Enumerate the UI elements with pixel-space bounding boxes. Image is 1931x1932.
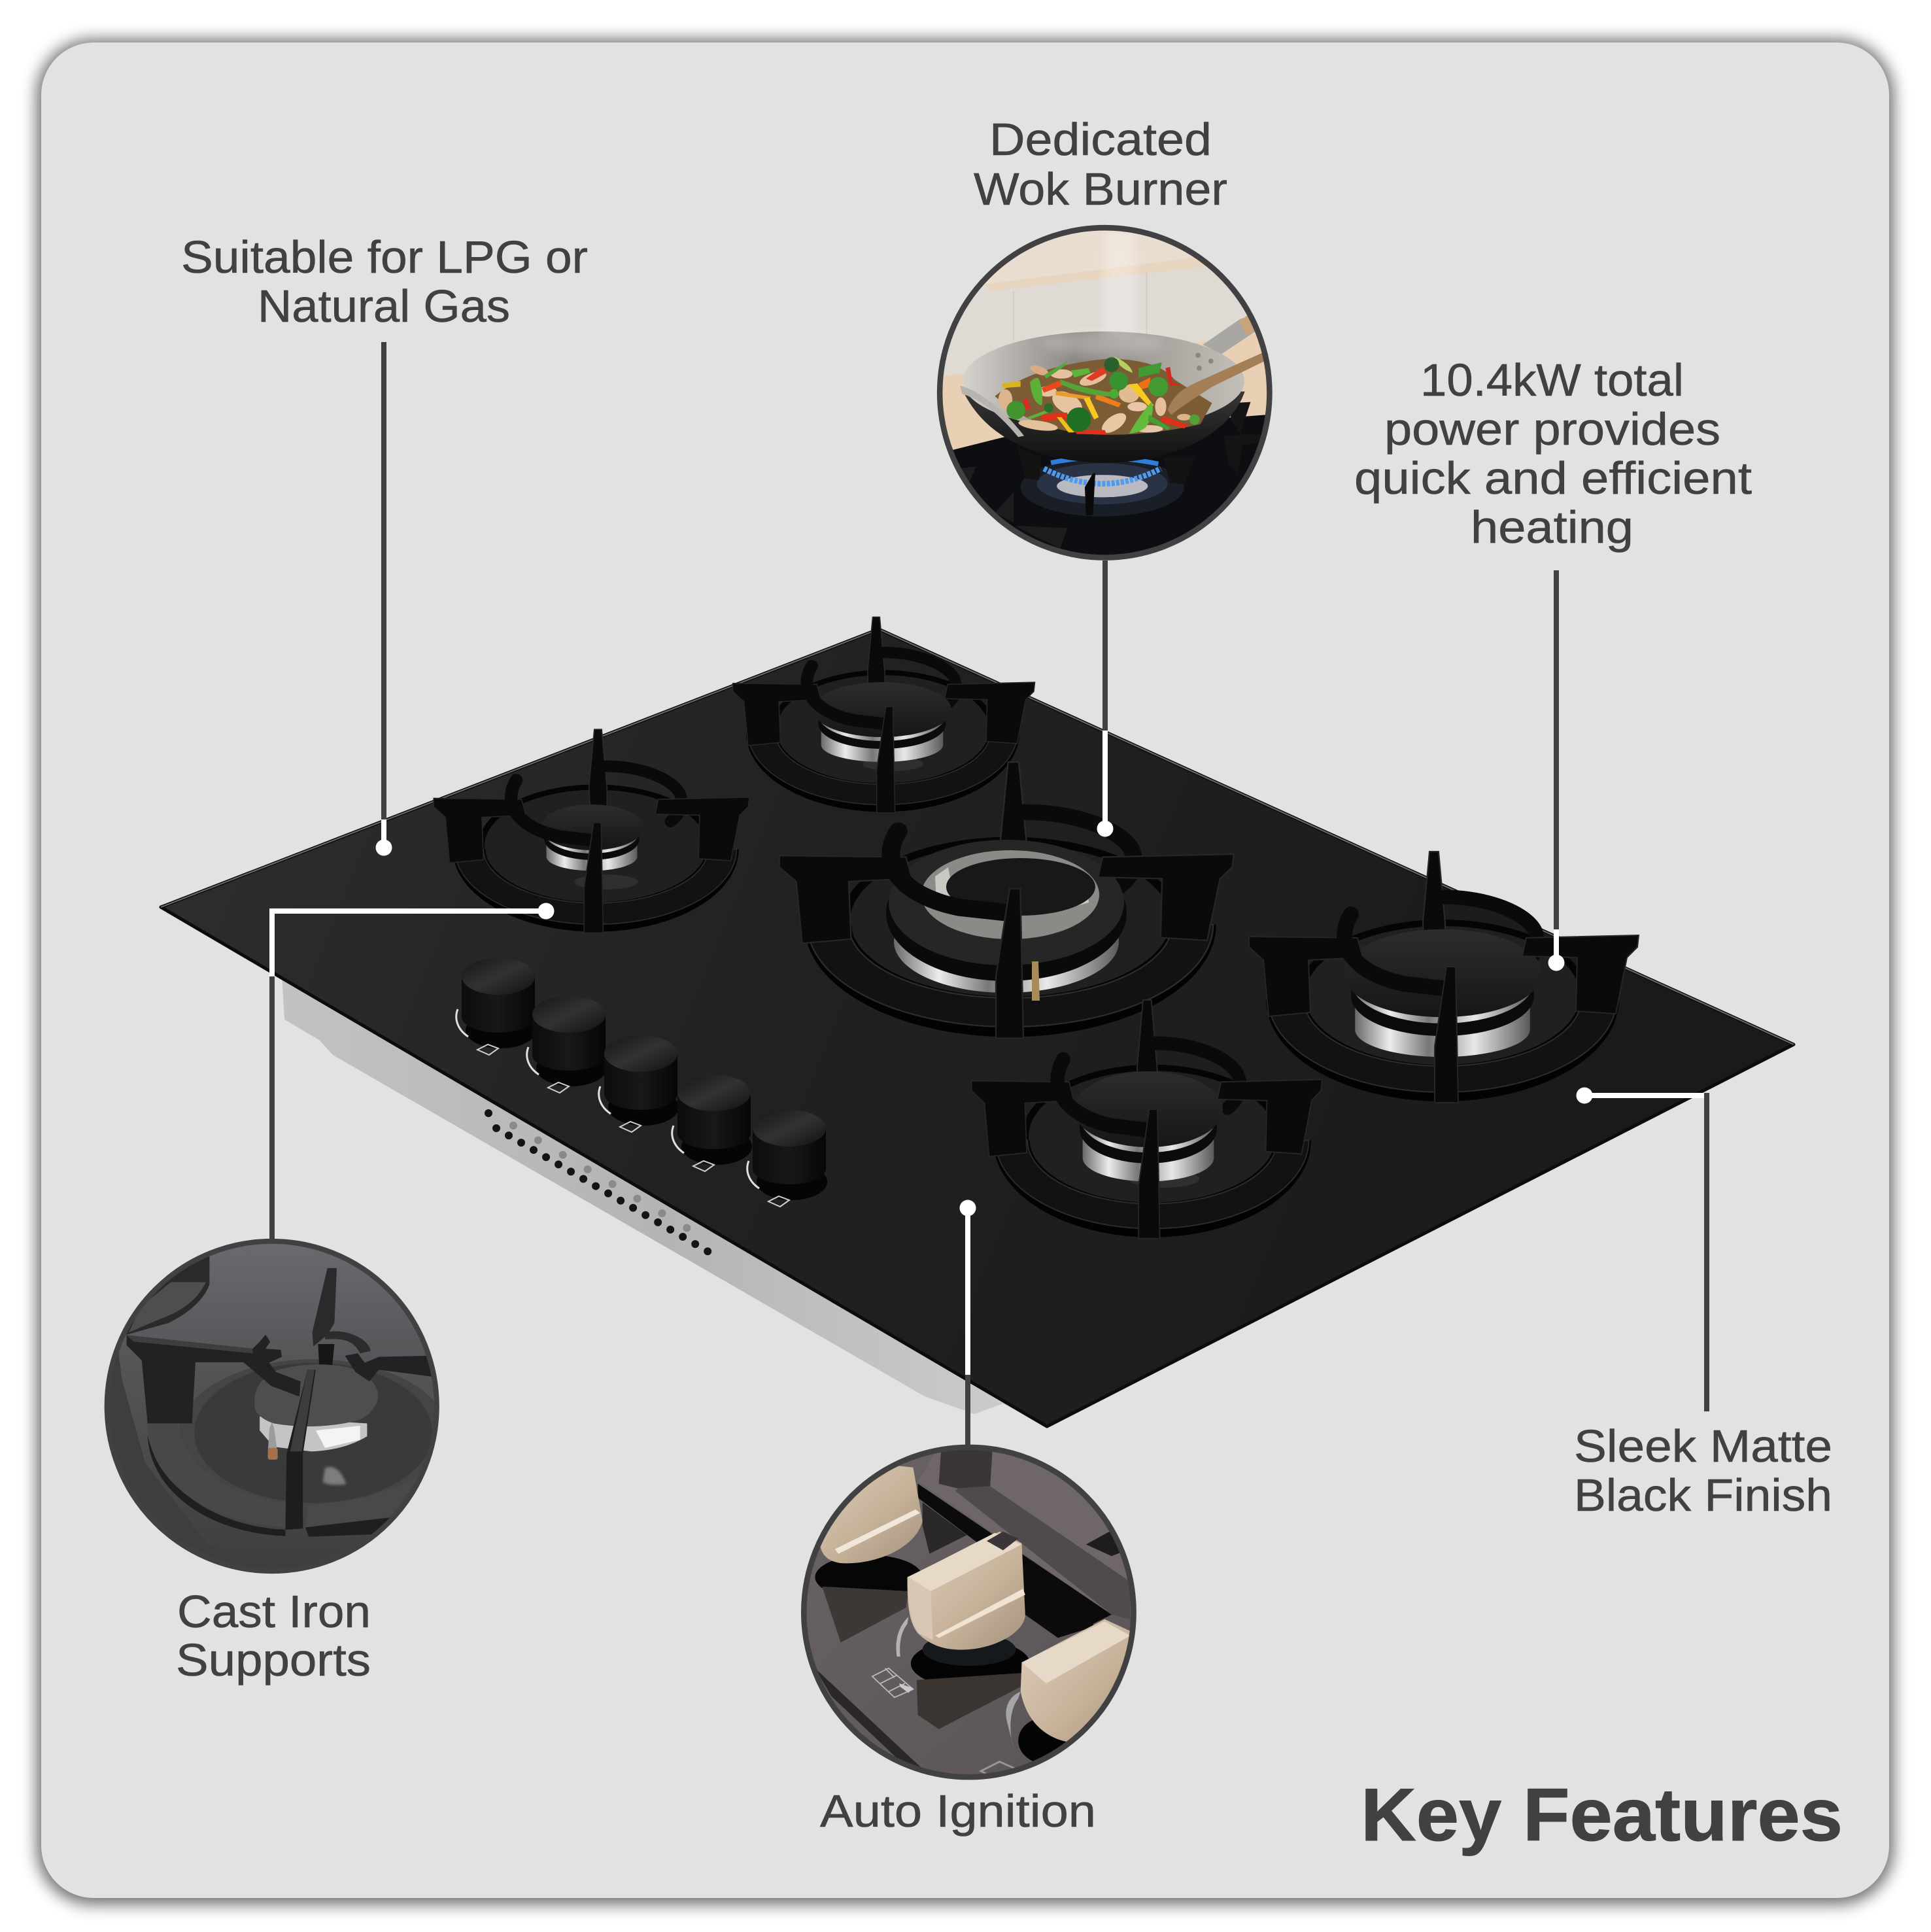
text: cast iron supports: Cast Iron [177,1586,371,1637]
text: sleek matte black finish [1574,1421,1832,1521]
text: cast iron supports [176,1586,371,1685]
text: dedicated wok burner: Wok Burner [974,164,1227,215]
text: auto ignition: Auto Ignition [820,1785,1096,1837]
burner: front centre [972,1000,1322,1239]
text: dedicated wok burner: Dedicated [989,114,1212,165]
text: total power: 10.4kW total [1420,354,1684,405]
callout: matte finish line [1576,1087,1707,1411]
callout: power line [1548,570,1564,971]
text: total power: quick and efficient [1354,453,1752,504]
title: key features: Key Features [1361,1774,1843,1857]
photo circle: wok [929,218,1280,569]
glass top [161,629,1794,1426]
text: LPG or natural gas [181,232,588,332]
vent holes [485,1109,711,1253]
burner: centre wok [779,762,1234,1039]
text: total power: power provides [1384,404,1720,455]
photo circle: auto ignition knobs [796,1440,1147,1789]
text: dedicated wok burner [974,114,1227,215]
text: LPG or natural gas: Natural Gas [258,281,510,332]
callout: auto ignition line [960,1199,976,1445]
text: cast iron supports: Supports [176,1634,371,1685]
burner: right [1249,852,1639,1103]
product: gas hob [161,617,1794,1426]
text: sleek matte black finish: Sleek Matte [1574,1421,1832,1472]
text: LPG or natural gas: Suitable for LPG or [181,232,588,283]
text: total power [1354,354,1752,553]
steel tray [282,975,1046,1426]
control knobs [456,958,827,1207]
photo circle: cast iron supports [99,1234,449,1585]
text: total power: heating [1471,502,1633,553]
callout: LPG or natural gas line [375,342,392,855]
burner: front left [434,729,749,933]
text: sleek matte black finish: Black Finish [1574,1470,1832,1521]
callout: cast iron line [272,903,555,1240]
burner: back [733,617,1034,813]
callout: wok burner line [1097,561,1113,837]
